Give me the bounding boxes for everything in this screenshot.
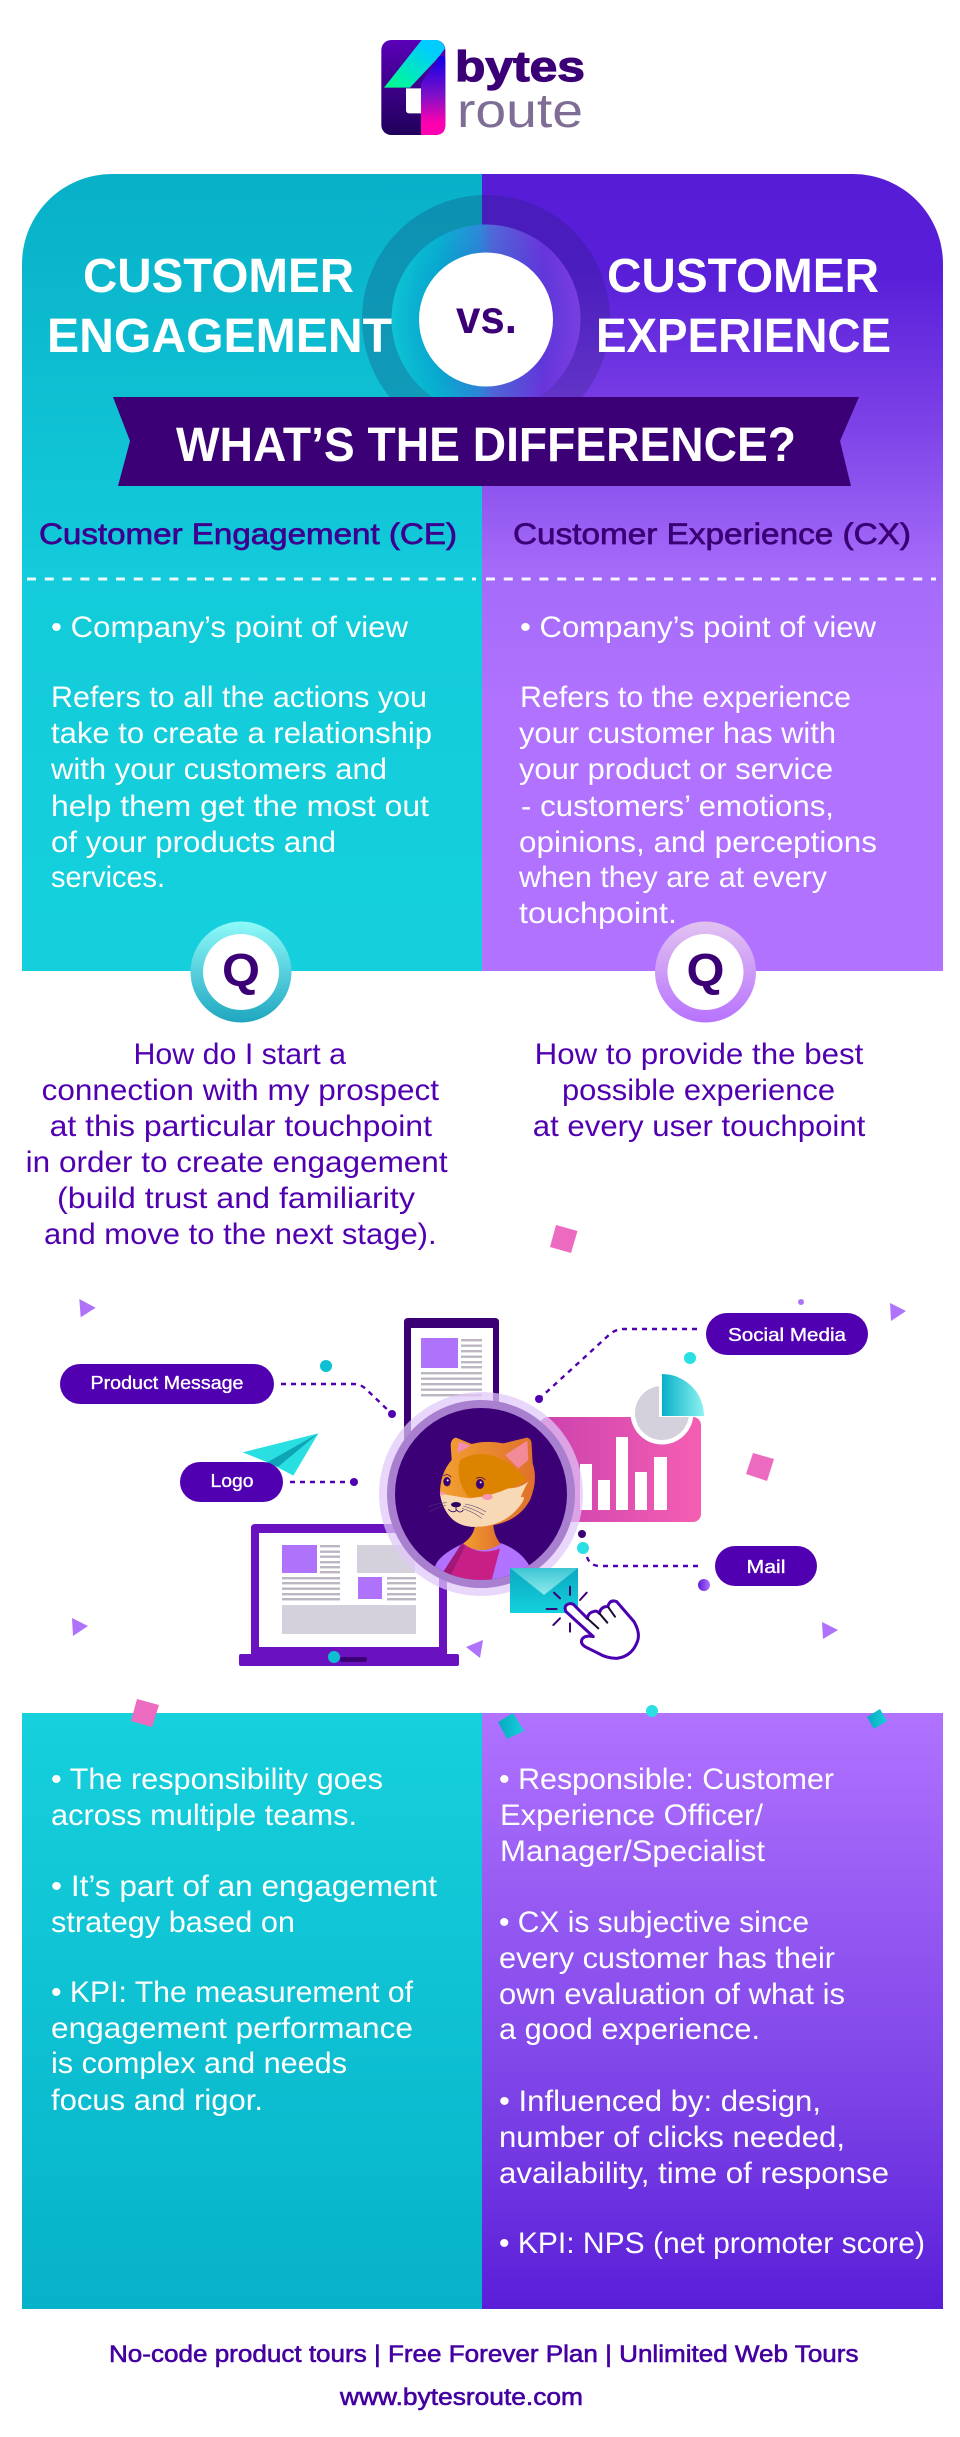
pill: product message: Product Message [90, 1373, 244, 1393]
vs badge rings [362, 195, 610, 443]
pill: logo [180, 1462, 283, 1502]
pill: product message [60, 1364, 274, 1404]
text block: customer experience details: a good experience. [499, 2013, 760, 2046]
illustration: customer touchpoints [60, 1225, 906, 1666]
icon: laptop [239, 1524, 459, 1666]
decoration: small lilac dot [798, 1299, 804, 1305]
text block: customer experience details: • KPI: NPS (net promoter score) [499, 2227, 925, 2260]
text block: question left: and move to the next stage). [44, 1218, 437, 1251]
title: customer engagement: CUSTOMER [83, 250, 354, 303]
title: customer experience [596, 250, 891, 363]
decoration: teal dot right [684, 1352, 696, 1364]
text block: question left: in order to create engagement [26, 1146, 448, 1179]
logo word: route: route [457, 85, 583, 138]
connector: product message [281, 1384, 396, 1418]
decoration: teal square left [498, 1713, 524, 1739]
text block: customer experience details: Manager/Specialist [500, 1835, 766, 1868]
text block: question left: connection with my prospect [42, 1074, 440, 1107]
text block: customer experience definition: touchpoint. [519, 897, 677, 930]
decoration: teal dot left [320, 1360, 332, 1372]
text block: customer engagement details: across multiple teams. [51, 1799, 357, 1832]
panel: bottom left [22, 1713, 482, 2309]
icon: logo mark [381, 40, 445, 135]
panel: top left customer engagement [22, 174, 482, 971]
decoration: pink square on panel [131, 1699, 159, 1727]
pill: social media: Social Media [728, 1325, 847, 1345]
text block: customer experience details: • Influenced by: design, [499, 2085, 821, 2118]
icon: pink bar chart card [540, 1372, 706, 1522]
text block: customer experience definition: your product or service [519, 753, 833, 786]
icon: envelope [510, 1568, 578, 1613]
text block: customer experience details: Experience Officer/ [500, 1799, 764, 1832]
decoration: triangle bottom right [822, 1622, 838, 1639]
banner: what's the difference [113, 397, 859, 486]
text block: customer experience details: every customer has their [499, 1942, 835, 1975]
text block: question left: How do I start a [134, 1038, 346, 1071]
ring glow [392, 224, 580, 414]
banner: what's the difference: WHAT’S THE DIFFERENCE? [176, 419, 796, 472]
avatar background [395, 1408, 567, 1580]
panel: bottom right [482, 1713, 943, 2309]
avatar: fox in circle [379, 1392, 583, 1596]
title: customer engagement [47, 250, 392, 363]
text block: question right: at every user touchpoint [533, 1110, 866, 1143]
text block: customer engagement definition: take to create a relationship [51, 717, 432, 750]
text block: customer engagement details: engagement performance [51, 2012, 413, 2045]
avatar middle ring [387, 1400, 575, 1588]
text block: customer engagement definition: Refers to all the actions you [51, 681, 427, 714]
text block: customer experience definition: Refers to the experience [520, 681, 851, 714]
icon: pointing hand with tap marks [547, 1587, 638, 1658]
text block: customer engagement details: • The responsibility goes [51, 1763, 383, 1796]
text block: customer engagement definition: of your products and [51, 826, 336, 859]
title: customer experience: CUSTOMER [607, 250, 879, 303]
icon: Q badge left [190, 922, 292, 1022]
middle ring [392, 224, 580, 414]
icon: Q badge left: Q [222, 944, 260, 996]
text block: customer experience details: number of clicks needed, [499, 2121, 845, 2154]
title: customer engagement: ENGAGEMENT [47, 310, 392, 363]
text block: customer engagement details: focus and rigor. [51, 2084, 263, 2117]
text block: customer experience definition: your customer has with [519, 717, 836, 750]
vs label: vs. [456, 291, 517, 343]
decoration: triangle bottom left [72, 1618, 88, 1636]
decoration: triangle top left [79, 1299, 96, 1317]
outer ring [362, 195, 610, 443]
icon: Q badge right: Q [686, 944, 724, 996]
text block: customer experience details: • CX is subjective since [499, 1906, 809, 1939]
text block: customer experience definition [518, 611, 877, 930]
text block: question left: (build trust and familiarity [57, 1182, 415, 1215]
logo word: bytes: bytes [455, 43, 585, 91]
text block: customer engagement details: is complex and needs [51, 2047, 347, 2080]
white centre [419, 252, 553, 386]
logo: bytes route [381, 40, 585, 138]
pill: mail: Mail [746, 1557, 786, 1577]
text block: question left: at this particular touchpoint [50, 1110, 433, 1143]
text block: customer engagement definition: • Company’s point of view [51, 611, 408, 644]
pill: mail [715, 1546, 817, 1586]
text block: customer experience definition: • Company’s point of view [520, 611, 876, 644]
text block: customer engagement details [51, 1763, 438, 2117]
decoration: pink square top [550, 1225, 578, 1253]
decoration: triangle top right [890, 1303, 906, 1321]
text block: question right [533, 1038, 866, 1143]
text block: question right: possible experience [562, 1074, 835, 1107]
footer: tagline: No-code product tours | Free Forever Plan | Unlimited Web Tours [109, 2341, 858, 2368]
decoration: triangle centre [466, 1640, 483, 1658]
text block: customer experience details [499, 1763, 925, 2260]
text block: customer engagement details: • KPI: The measurement of [51, 1976, 414, 2009]
text block: question right: How to provide the best [535, 1038, 864, 1071]
text block: customer experience details: own evaluation of what is [499, 1978, 845, 2011]
fox character [428, 1438, 535, 1587]
text block: customer engagement definition: with your customers and [50, 753, 387, 786]
footer: website: www.bytesroute.com [339, 2384, 583, 2411]
decoration: teal dot on panel [646, 1705, 658, 1717]
avatar outer ring [379, 1392, 583, 1596]
decoration: teal square right [867, 1709, 887, 1729]
pill: social media [706, 1313, 868, 1355]
heading: customer engagement (CE): Customer Engagement (CE) [39, 518, 457, 551]
text block: customer experience details: availability, time of response [499, 2157, 889, 2190]
text block: customer engagement definition [50, 611, 432, 894]
icon: Q badge right [655, 922, 756, 1022]
text block: customer experience details: • Responsible: Customer [499, 1763, 834, 1796]
text block: customer engagement details: strategy based on [51, 1906, 295, 1939]
icon: tablet document [404, 1318, 499, 1440]
heading: customer experience (CX): Customer Experience (CX) [513, 518, 911, 551]
text block: question left [26, 1038, 448, 1251]
text block: customer engagement details: • It’s part of an engagement [51, 1870, 438, 1903]
text block: customer engagement definition: services. [51, 861, 165, 894]
pill: logo: Logo [210, 1471, 254, 1491]
panel: top right customer experience [482, 174, 943, 971]
decoration: pink square right [746, 1453, 774, 1481]
text block: customer experience definition: opinions, and perceptions [519, 826, 877, 859]
text block: customer experience definition: when they are at every [518, 861, 827, 894]
text block: customer engagement definition: help them get the most out [51, 790, 430, 823]
decoration: hexagon dot [698, 1579, 710, 1591]
title: customer experience: EXPERIENCE [596, 310, 891, 363]
connector: social media [535, 1329, 697, 1403]
connector: mail [577, 1530, 703, 1566]
connector: logo [290, 1478, 358, 1486]
icon: paper plane [243, 1433, 318, 1476]
text block: customer experience definition: - customers’ emotions, [521, 790, 834, 823]
